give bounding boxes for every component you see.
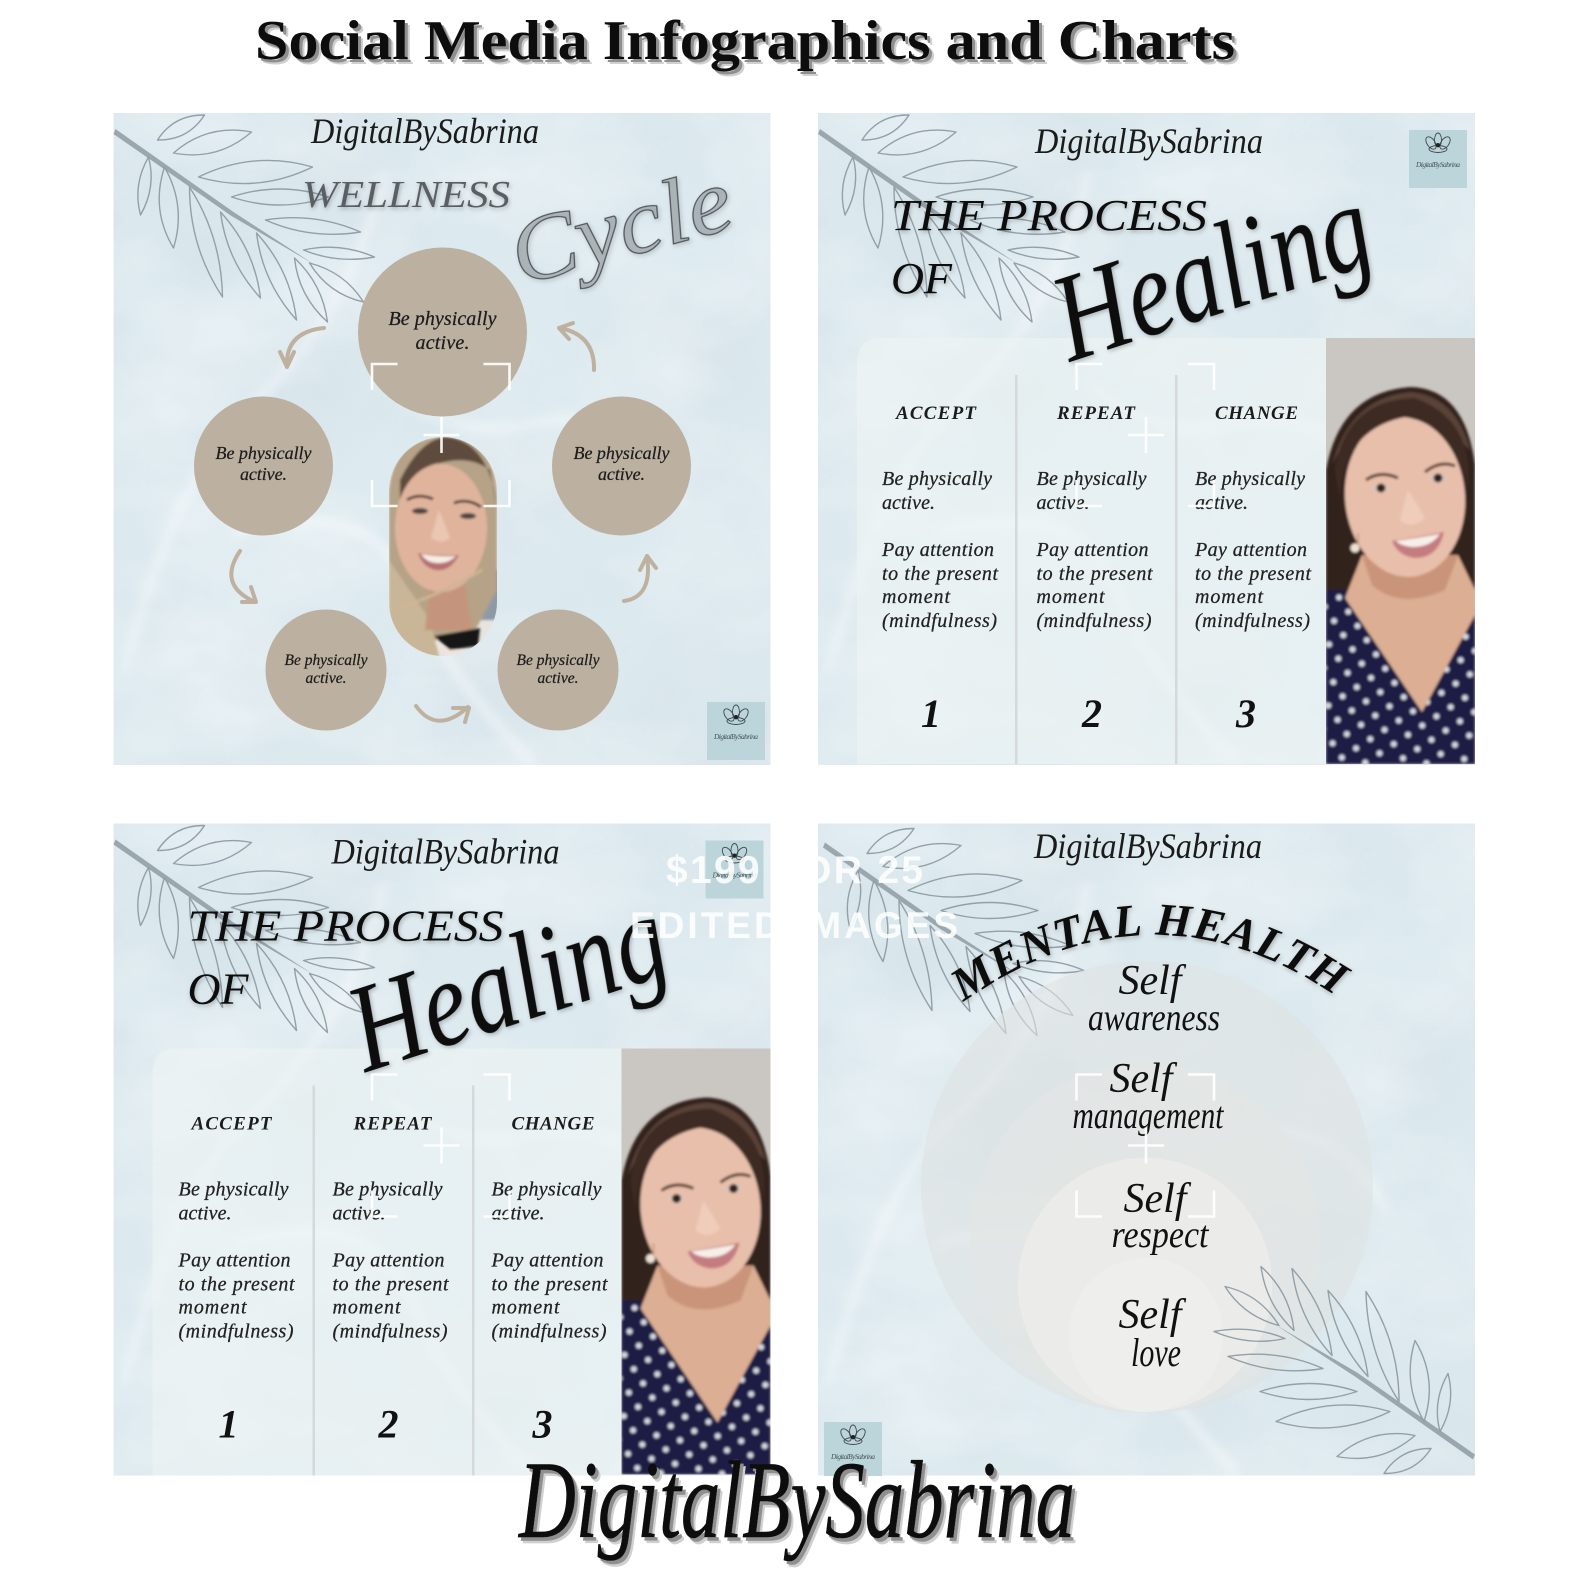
concentric circles	[921, 961, 1373, 1413]
panel: process of healing (bottom left)	[114, 824, 770, 1476]
level: self respect: respect	[1112, 1214, 1210, 1256]
step circle bottom left: active.	[306, 670, 346, 687]
step circle bottom right: active.	[538, 670, 578, 687]
column dividers	[1015, 375, 1178, 764]
column: accept: ACCEPT	[190, 1114, 273, 1134]
level: self love: love	[1131, 1330, 1181, 1375]
heading: wellness: WELLNESS	[302, 174, 510, 216]
brand wordmark: DigitalBySabrina	[517, 1438, 1075, 1561]
column: accept: 1	[218, 1402, 238, 1446]
column: accept	[178, 1114, 295, 1446]
column: accept: (mindfulness)	[882, 610, 997, 632]
column: accept: ACCEPT	[895, 403, 977, 424]
column: change: Pay attention	[490, 1250, 604, 1272]
column: accept: Be physically	[178, 1178, 289, 1200]
column dividers	[312, 1086, 474, 1476]
logo badge	[706, 840, 764, 898]
column: repeat: (mindfulness)	[332, 1320, 448, 1342]
column: change: Pay attention	[1194, 539, 1307, 561]
column: repeat: active.	[1036, 492, 1090, 514]
level: self management: Self	[1110, 1056, 1178, 1102]
column: change: 3	[532, 1402, 552, 1446]
column: repeat: moment	[332, 1296, 401, 1318]
column: change	[490, 1114, 608, 1446]
column: repeat: Be physically	[332, 1178, 443, 1200]
column: change: active.	[492, 1202, 544, 1224]
bottom right leaf	[1214, 1266, 1475, 1474]
column: repeat: Be physically	[1036, 468, 1147, 490]
column: repeat: 2	[1081, 691, 1102, 736]
heading: the process of: OF	[188, 964, 250, 1014]
heading: the process of	[891, 191, 1207, 303]
portrait photo	[622, 1048, 770, 1474]
column: repeat: 2	[378, 1402, 398, 1446]
photo edit corner marks	[372, 364, 510, 506]
panel: wellness cycle	[114, 111, 770, 765]
column: accept: active.	[178, 1202, 232, 1224]
heading: healing: Healing	[330, 867, 683, 1100]
brand signature: DigitalBySabrina	[1033, 826, 1262, 866]
column: change: Be physically	[1195, 468, 1305, 490]
column: change: CHANGE	[1215, 403, 1298, 424]
column: accept: Pay attention	[178, 1250, 290, 1272]
column: change: (mindfulness)	[492, 1320, 607, 1342]
level: self awareness	[1088, 958, 1220, 1039]
column: change: CHANGE	[512, 1114, 594, 1134]
brand signature: DigitalBySabrina	[1034, 121, 1263, 161]
step circle right: Be physically	[574, 443, 670, 463]
step circle bottom left	[266, 610, 386, 730]
column: accept: 1	[921, 691, 941, 736]
column: change: active.	[1195, 492, 1248, 514]
column: accept: moment	[178, 1296, 247, 1318]
heading: the process of: THE PROCESS	[188, 902, 504, 950]
level: self management	[1072, 1056, 1225, 1137]
heading: cycle: Cycle	[499, 148, 743, 304]
column: accept: Pay attention	[881, 539, 994, 561]
table card	[857, 338, 1326, 764]
logo badge	[707, 702, 765, 760]
step circle bottom left: Be physically	[284, 652, 368, 669]
heading: the process of: OF	[891, 254, 953, 303]
step circle bottom right	[498, 610, 618, 730]
column: repeat: Pay attention	[1036, 539, 1148, 561]
step circle bottom right: Be physically	[516, 652, 600, 669]
column: repeat: active.	[332, 1202, 386, 1224]
photo edit corner marks	[372, 1074, 510, 1216]
column: repeat	[332, 1114, 449, 1446]
photo edit corner marks	[1076, 364, 1214, 506]
column: repeat: to the present	[332, 1274, 449, 1296]
column: accept	[881, 403, 998, 736]
brand signature: DigitalBySabrina	[310, 111, 539, 151]
column: repeat: Pay attention	[332, 1250, 444, 1272]
logo badge: DigitalBySabrina	[713, 732, 758, 741]
column: repeat: (mindfulness)	[1036, 610, 1152, 632]
level: self love	[1119, 1292, 1187, 1375]
column: change: to the present	[1195, 563, 1311, 585]
table card	[152, 1048, 622, 1476]
step circle right	[552, 396, 691, 536]
panel: mental health	[818, 824, 1475, 1476]
cycle arrows	[231, 323, 656, 722]
column: change: Be physically	[492, 1178, 602, 1200]
step circle left: active.	[240, 464, 287, 484]
logo badge: DigitalBySabrina	[830, 1452, 875, 1461]
column: change	[1194, 403, 1311, 736]
portrait: pill photo	[389, 437, 500, 660]
watermark: price offer: $199 FOR 25	[666, 849, 923, 892]
photo edit corner marks	[1076, 1074, 1214, 1216]
portrait photo	[1326, 338, 1475, 764]
level: self management: management	[1072, 1095, 1225, 1137]
step circle top: Be physically	[388, 308, 497, 330]
column: change: (mindfulness)	[1195, 610, 1310, 632]
column: change: moment	[492, 1296, 560, 1318]
column: repeat	[1036, 403, 1153, 736]
level: self respect	[1112, 1176, 1210, 1256]
level: self respect: Self	[1124, 1176, 1192, 1222]
brand signature: DigitalBySabrina	[331, 832, 560, 872]
column: repeat: moment	[1036, 586, 1105, 608]
heading: healing: Healing	[1034, 157, 1388, 389]
column: accept: to the present	[178, 1274, 295, 1296]
column: accept: Be physically	[882, 468, 992, 490]
column: repeat: REPEAT	[1056, 403, 1136, 424]
level: self awareness: Self	[1119, 958, 1187, 1004]
logo badge	[824, 1422, 882, 1476]
level: self love: Self	[1119, 1292, 1187, 1338]
column: change: 3	[1235, 691, 1256, 736]
column: repeat: REPEAT	[352, 1114, 433, 1134]
column: accept: (mindfulness)	[178, 1320, 294, 1342]
logo badge	[1409, 130, 1467, 188]
watermark: price offer	[630, 849, 958, 946]
panel: process of healing (top right)	[818, 113, 1475, 765]
heading: the process of: THE PROCESS	[891, 191, 1207, 240]
column: repeat: to the present	[1036, 563, 1153, 585]
step circle right: active.	[598, 464, 645, 484]
curved heading: mental health: MENTAL HEALTH	[951, 904, 1353, 1004]
column: change: moment	[1195, 586, 1263, 608]
level: self awareness: awareness	[1088, 997, 1220, 1039]
step circle top: active.	[416, 332, 470, 354]
column: accept: active.	[882, 492, 935, 514]
logo badge: DigitalBySabrina	[1415, 160, 1460, 169]
column: accept: to the present	[882, 563, 998, 585]
logo badge: DigitalBySabrina	[712, 870, 757, 880]
title: Social Media Infographics and Charts	[255, 10, 1235, 72]
column: accept: moment	[882, 586, 950, 608]
column: change: to the present	[492, 1274, 608, 1296]
heading: the process of	[188, 902, 504, 1014]
watermark: price offer: EDITED IMAGES	[630, 905, 958, 946]
step circle left	[194, 396, 333, 536]
step circle top	[358, 248, 527, 416]
step circle left: Be physically	[216, 443, 312, 463]
